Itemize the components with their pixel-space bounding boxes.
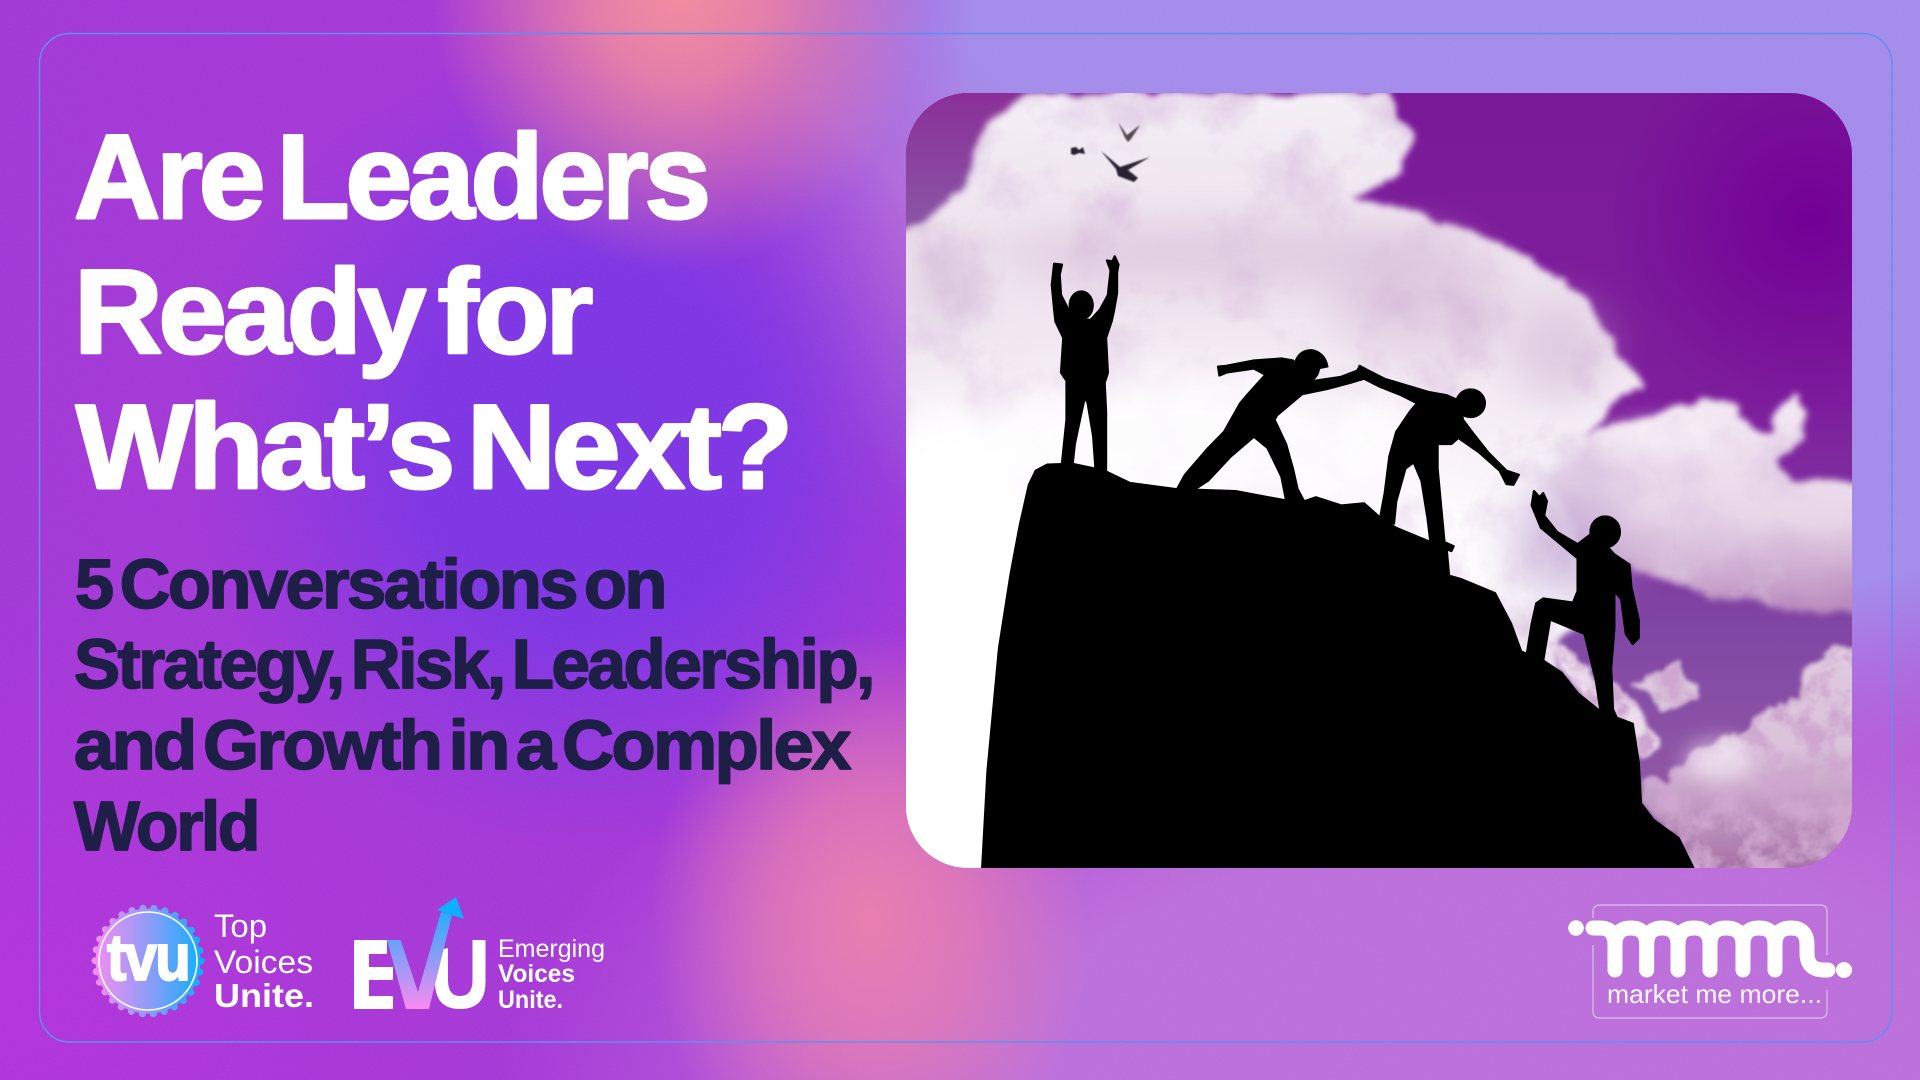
market me more text: market me more... (1607, 979, 1822, 1009)
climber 3: reaching down (1360, 366, 1519, 551)
subtitle: Strategy, Risk, Leadership, (74, 625, 873, 703)
tvu badge: tvu (107, 920, 189, 994)
title (74, 110, 789, 514)
tvu wordmark: Top (214, 908, 267, 944)
climber 2: reaching back (1177, 350, 1364, 500)
cloud shading (1000, 223, 1460, 287)
subtitle (74, 545, 873, 865)
birds (1071, 122, 1150, 182)
EVU wordmark: Voices (498, 960, 575, 988)
title: Ready for (74, 245, 591, 379)
mmm mark (1568, 920, 1852, 978)
logo: Emerging Voices Unite (354, 897, 605, 1014)
subtitle: 5 Conversations on (75, 545, 665, 623)
title: Are Leaders (74, 110, 707, 244)
title: What’s Next? (76, 380, 789, 514)
logo: market me more (1568, 905, 1852, 1018)
tvu badge (95, 908, 201, 1014)
subtitle: and Growth in a Complex (74, 706, 852, 784)
EVU wordmark: Unite. (498, 986, 563, 1014)
cliff and climbers silhouette (982, 256, 1695, 871)
climber 4: climbing up (1527, 491, 1639, 718)
logo: Top Voices Unite (95, 908, 314, 1014)
tvu wordmark: Voices (214, 944, 313, 980)
EVU wordmark (498, 935, 605, 1014)
cliff (982, 464, 1695, 871)
subtitle: World (74, 787, 258, 865)
photo panel: climbers on a cliff against clouds (906, 93, 1852, 868)
tvu wordmark: Unite. (214, 977, 314, 1014)
EVU wordmark: Emerging (498, 935, 605, 963)
clouds (906, 93, 1852, 868)
sky (906, 93, 1852, 868)
EVU mark (354, 897, 486, 1009)
tvu wordmark (214, 908, 314, 1014)
logo outline box (1593, 905, 1827, 1018)
climber 1: arms raised (1052, 256, 1118, 471)
